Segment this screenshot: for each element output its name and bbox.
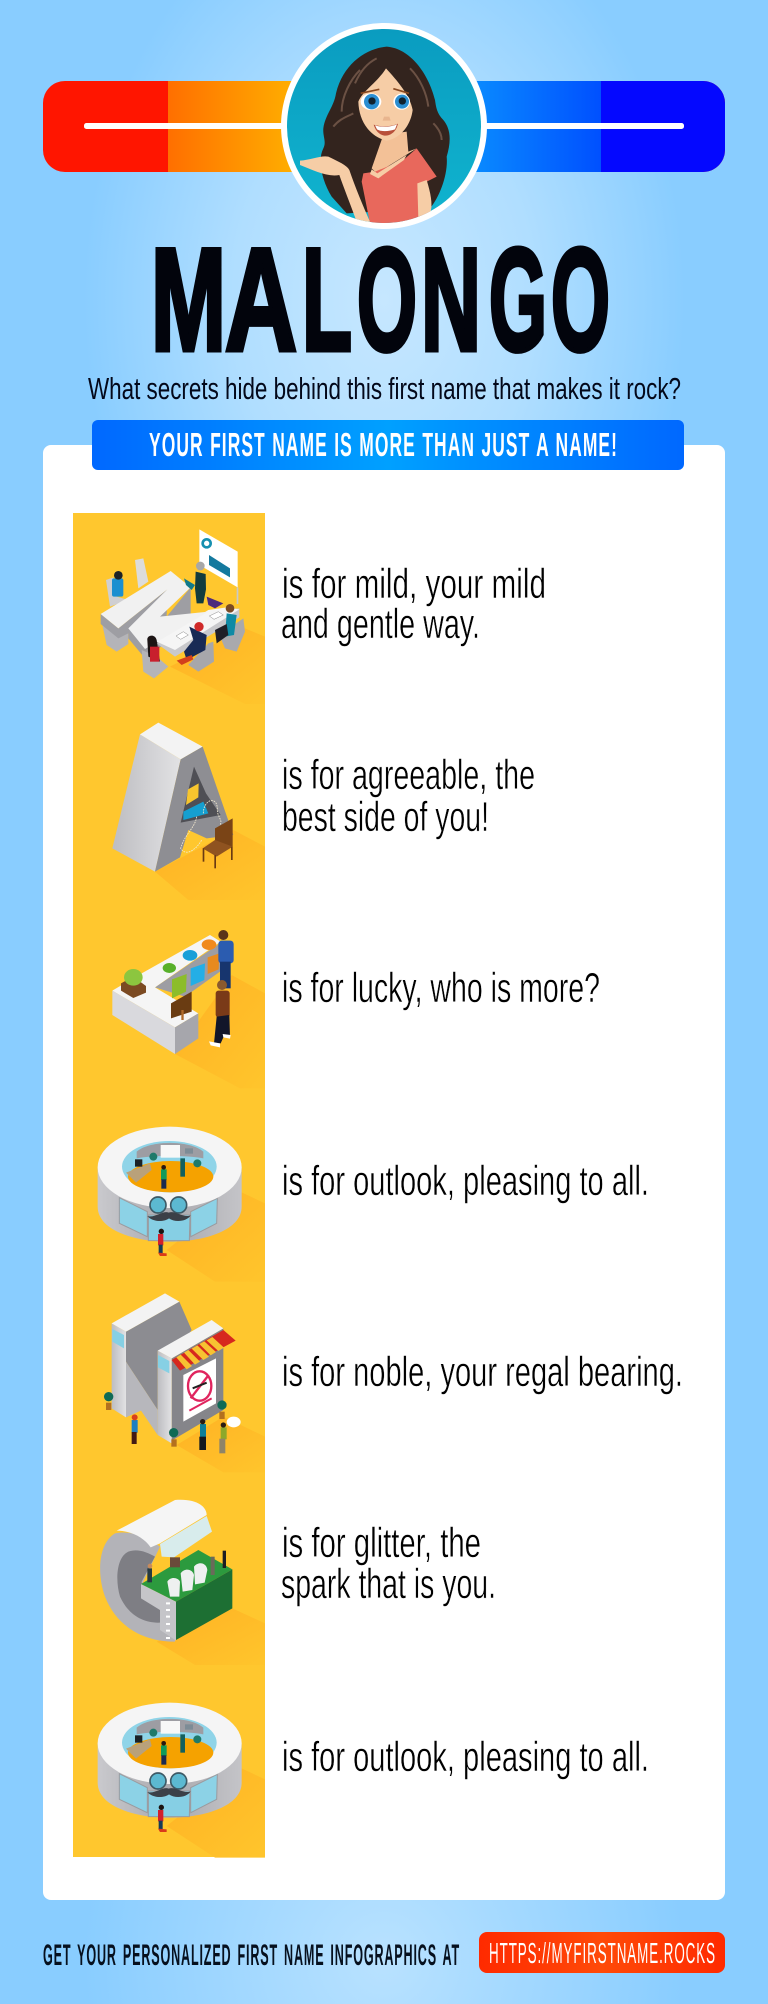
text: A line: is for agreeable, the — [282, 751, 535, 798]
title: A — [225, 218, 297, 381]
text: L line: is for lucky, who is more? — [282, 964, 600, 1011]
header color bar — [43, 81, 725, 172]
title: N — [421, 218, 481, 381]
title: M — [151, 218, 226, 381]
illustration: letter L recycling desk — [112, 930, 265, 1088]
illustration: letter A with chair — [112, 723, 265, 900]
text: M line: is for mild, your mild — [282, 560, 546, 607]
title: O — [551, 218, 610, 381]
illustration: letter G with green block — [100, 1500, 265, 1665]
panel: name letters — [43, 445, 725, 1900]
title: L — [302, 218, 352, 381]
text: M line: and gentle way. — [281, 600, 480, 647]
banner: your first name — [92, 420, 684, 470]
illustration: letter N storefront — [104, 1293, 265, 1472]
footer url button — [479, 1932, 725, 1973]
text: G line: is for glitter, the — [282, 1519, 481, 1566]
illustration: letter M meeting table — [101, 529, 265, 704]
text: G line: spark that is you. — [281, 1560, 496, 1607]
avatar: cartoon woman in circle — [281, 23, 487, 229]
title: G — [489, 218, 547, 381]
title: O — [357, 218, 417, 381]
text: A line: best side of you! — [282, 793, 489, 840]
illustration: letter O building repeat — [98, 1703, 265, 1858]
illustration: letter O building — [98, 1127, 265, 1282]
